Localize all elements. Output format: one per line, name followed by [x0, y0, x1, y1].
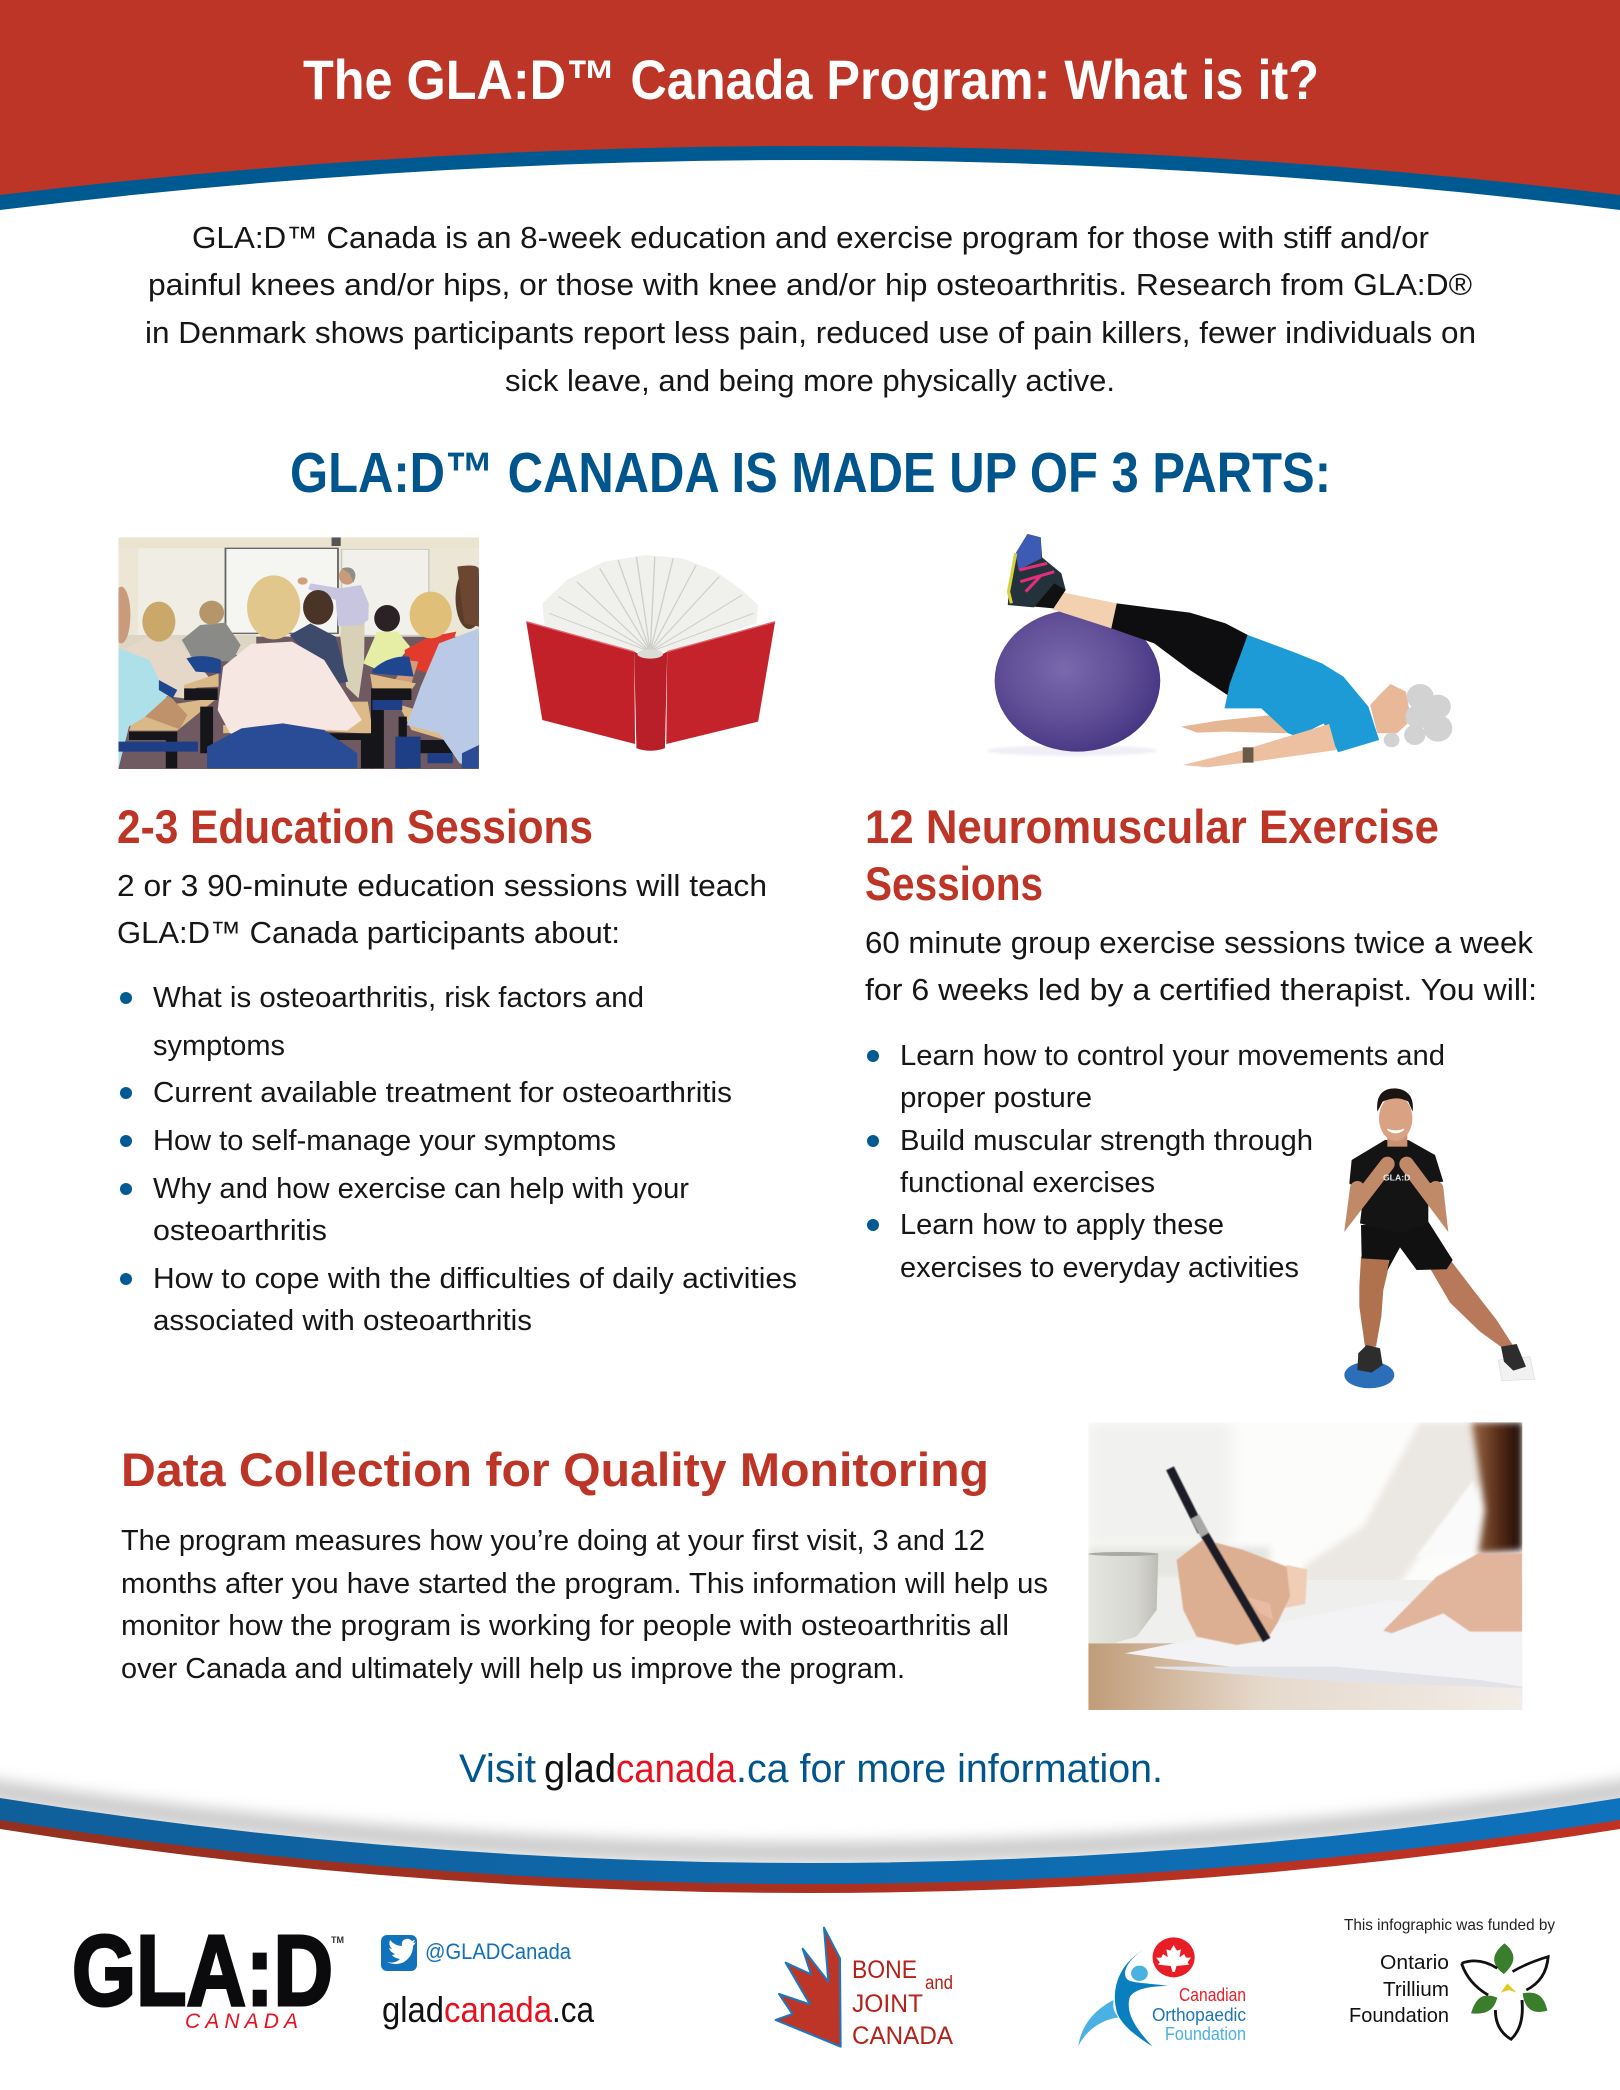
- section: education: [117, 800, 797, 1337]
- section: data collection: [121, 1443, 1048, 1685]
- chairs: [207, 723, 357, 768]
- education bullet list: associated with osteoarthritis: [153, 1305, 532, 1337]
- website call to action: canada: [616, 1747, 737, 1791]
- title: The GLA:D™ Canada Program: What is it?: [303, 48, 1319, 111]
- logo: Canadian Orthopaedic Foundation: Foundation: [1165, 2024, 1246, 2044]
- education bullet list: [120, 982, 797, 1337]
- data collection text: [121, 1525, 1048, 1685]
- logo: GLA:D Canada: TM: [331, 1935, 344, 1945]
- photo: hand writing on paper: [1088, 1422, 1522, 1710]
- intro text block: GLA:D™ Canada is an 8-week education and exercise program for those with stiff and/or: [192, 220, 1429, 255]
- section heading: GLA:D™ CANADA IS MADE UP OF 3 PARTS:: [290, 441, 1331, 505]
- education bullet list: How to self-manage your symptoms: [153, 1125, 616, 1157]
- logo: Bone and Joint Canada: BONE: [852, 1956, 917, 1984]
- exercise bullet list: [867, 1040, 1445, 1284]
- website call to action: Visit: [459, 1747, 536, 1791]
- exercise intro text: [865, 925, 1537, 1007]
- teacher: [298, 567, 369, 698]
- header banner: [0, 0, 1620, 210]
- logo: Canadian Orthopaedic Foundation: Canadian: [1179, 1985, 1246, 2005]
- education intro text: GLA:D™ Canada participants about:: [117, 915, 620, 950]
- logo: Bone and Joint Canada: CANADA: [852, 2022, 953, 2050]
- intro text block: [145, 220, 1476, 398]
- photo: man balancing on disc: GLA:D: [1383, 1173, 1410, 1183]
- education bullet list: osteoarthritis: [153, 1215, 327, 1247]
- website: canada: [444, 1989, 553, 2030]
- logo: Ontario Trillium Foundation: [1349, 1943, 1548, 2039]
- website: .ca: [552, 1989, 595, 2030]
- exercise intro text: for 6 weeks led by a certified therapist. You will:: [865, 972, 1537, 1007]
- intro text block: sick leave, and being more physically active.: [505, 363, 1115, 398]
- hair: [1384, 684, 1452, 747]
- education intro text: 2 or 3 90-minute education sessions will teach: [117, 868, 767, 903]
- section: exercise: [865, 800, 1537, 1284]
- logo: Canadian Orthopaedic Foundation: Orthopaedic: [1152, 2005, 1246, 2025]
- students foreground: [218, 642, 362, 734]
- data collection text: over Canada and ultimately will help us improve the program.: [121, 1653, 905, 1685]
- logo: Bone and Joint Canada: JOINT: [852, 1990, 923, 2018]
- website: glad: [382, 1989, 444, 2030]
- logo: GLA:D Canada: CANADA: [185, 2010, 298, 2033]
- photo: red book: [526, 555, 775, 751]
- data collection text: months after you have started the program. This information will help us: [121, 1568, 1048, 1600]
- logo: Ontario Trillium Foundation: Foundation: [1349, 2005, 1449, 2027]
- intro text block: in Denmark shows participants report less pain, reduced use of pain killers, fewer individuals on: [145, 315, 1476, 350]
- education bullet list: What is osteoarthritis, risk factors and: [153, 982, 644, 1014]
- heading: data collection: Data Collection for Quality Monitoring: [121, 1443, 989, 1496]
- logo: Canadian Orthopaedic Foundation: [1078, 1937, 1246, 2047]
- heading: education sessions: 2-3 Education Sessions: [117, 800, 593, 853]
- logo: Ontario Trillium Foundation: Ontario: [1380, 1952, 1449, 1974]
- icon: twitter: [381, 1935, 417, 1971]
- website: [382, 1989, 595, 2030]
- social and website: [381, 1935, 595, 2030]
- education intro text: [117, 868, 767, 950]
- arms: [1355, 1164, 1438, 1206]
- education bullet list: symptoms: [153, 1030, 285, 1062]
- logo: Ontario Trillium Foundation: Trillium: [1383, 1979, 1449, 2001]
- exercise bullet list: Learn how to apply these: [900, 1209, 1224, 1241]
- exercise bullet list: functional exercises: [900, 1167, 1155, 1199]
- heading: exercise sessions: [865, 800, 1439, 910]
- footer swoosh: [0, 1788, 1620, 1893]
- desks: [129, 673, 453, 768]
- data collection text: monitor how the program is working for people with osteoarthritis all: [121, 1610, 1009, 1642]
- heading: exercise sessions: Sessions: [865, 857, 1043, 910]
- education bullet list: Current available treatment for osteoarthritis: [153, 1077, 732, 1109]
- exercise intro text: 60 minute group exercise sessions twice a week: [865, 925, 1533, 960]
- funder credit: This infographic was funded by: [1344, 1917, 1555, 1934]
- exercise bullet list: Learn how to control your movements and: [900, 1040, 1445, 1072]
- logo: Bone and Joint Canada: [776, 1928, 953, 2050]
- website call to action: glad: [544, 1747, 616, 1791]
- website call to action: .ca for more information.: [736, 1747, 1163, 1791]
- exercise bullet list: Build muscular strength through: [900, 1125, 1313, 1157]
- exercise bullet list: proper posture: [900, 1082, 1092, 1114]
- exercise bullet list: exercises to everyday activities: [900, 1252, 1299, 1284]
- website call to action: [459, 1747, 1163, 1791]
- twitter handle: @GLADCanada: [425, 1939, 572, 1964]
- photo: woman bridging on exercise ball: [986, 534, 1452, 767]
- education bullet list: How to cope with the difficulties of daily activities: [153, 1263, 797, 1295]
- data collection text: The program measures how you’re doing at your first visit, 3 and 12: [121, 1525, 985, 1557]
- heading: exercise sessions: 12 Neuromuscular Exercise: [865, 800, 1439, 853]
- education bullet list: Why and how exercise can help with your: [153, 1173, 690, 1205]
- logo: Bone and Joint Canada: and: [925, 1973, 953, 1994]
- photo: man balancing on disc: [1344, 1088, 1535, 1388]
- logo: GLA:D Canada: GLA:D: [72, 1915, 333, 2027]
- intro text block: painful knees and/or hips, or those with knee and/or hip osteoarthritis. Research from GLA:D®: [148, 267, 1472, 302]
- photo: classroom: [112, 537, 483, 770]
